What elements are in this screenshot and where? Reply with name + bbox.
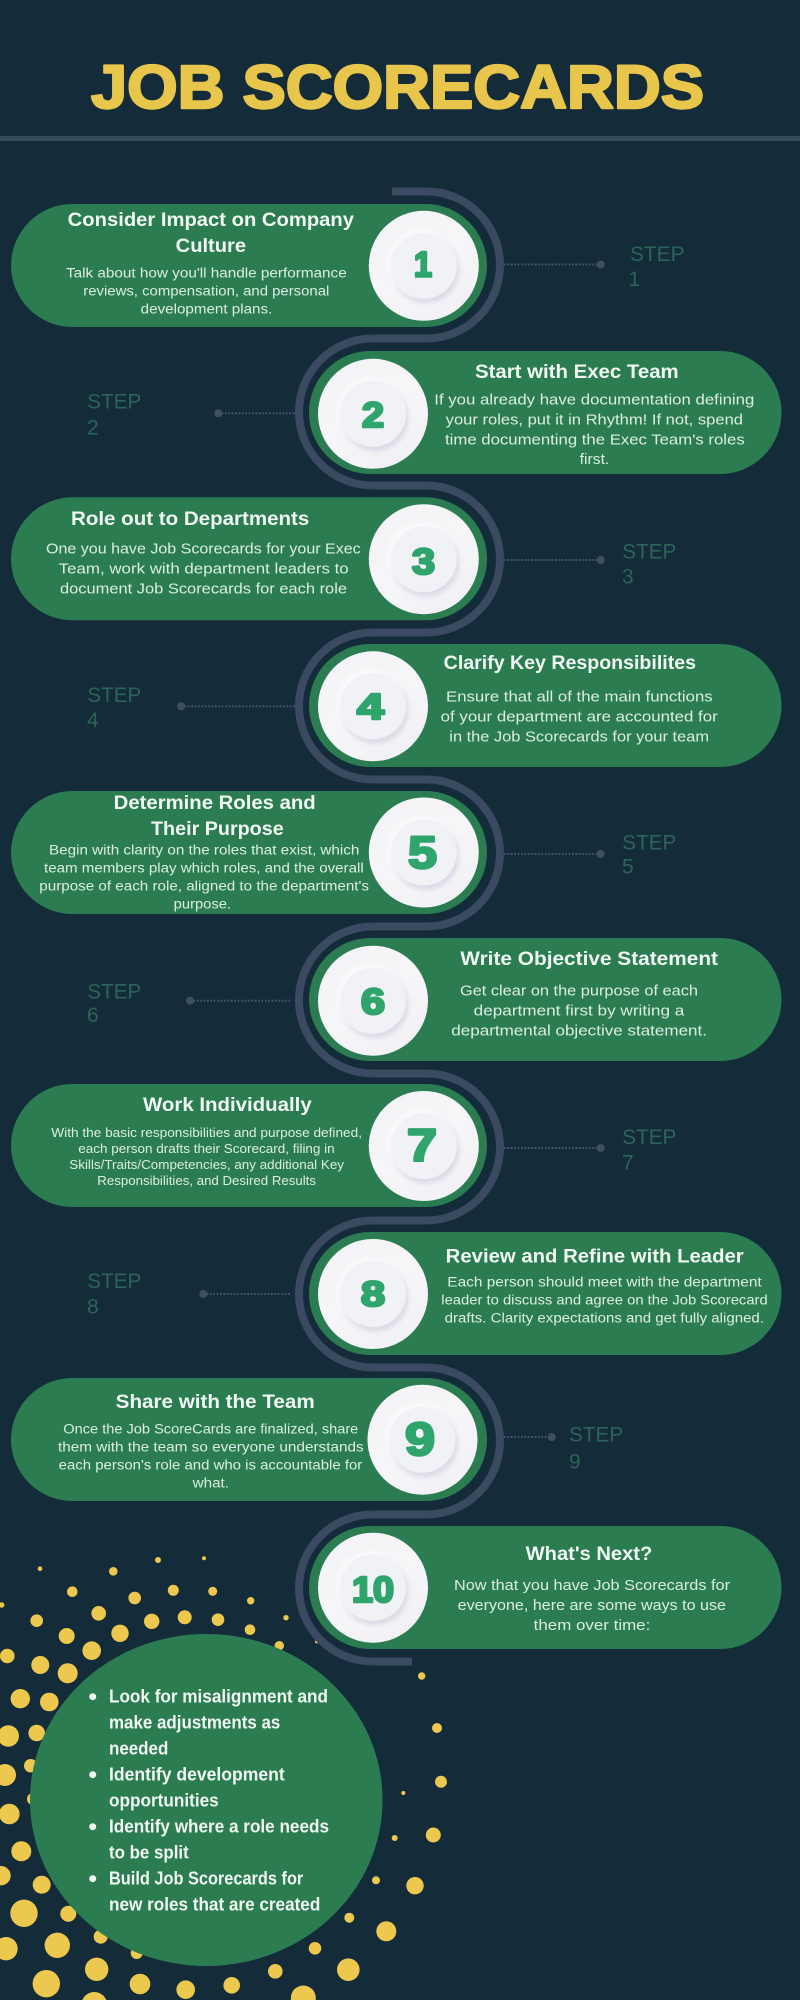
heading: step 10: What's Next? (526, 1543, 652, 1565)
callout: step 6 label: STEP (87, 980, 141, 1003)
panel: step 1 (11, 204, 487, 327)
text: step 1 body: development plans. (141, 301, 272, 317)
text: step 9 body: them with the team so everyone understands (58, 1439, 364, 1455)
panel: step 5 (11, 791, 487, 914)
callout: step 9 label: STEP (569, 1424, 623, 1447)
callout: step 9 label: 9 (569, 1450, 581, 1473)
text: step 3 body: One you have Job Scorecards for your Exec (46, 540, 361, 557)
list: next steps: opportunities (109, 1791, 219, 1811)
list: next steps: new roles that are created (109, 1895, 320, 1915)
callout: step 6 label: 6 (87, 1004, 99, 1027)
panel: step 6 (309, 938, 782, 1061)
callout: step 4 label: 4 (87, 709, 99, 732)
icon: number disc 7 (369, 1091, 479, 1201)
text: step 9 body: what. (192, 1475, 229, 1491)
text: step 6 body: Get clear on the purpose of each (460, 982, 698, 999)
list: next steps: Identify development (109, 1765, 285, 1785)
text: step 1 body (66, 265, 347, 317)
list: next steps: make adjustments as (109, 1713, 280, 1733)
icon: number disc 1: 1 (414, 246, 432, 285)
text: step 8 body (441, 1274, 768, 1326)
panel: step 2 (309, 351, 782, 474)
text: step 2 body (434, 391, 754, 468)
text: step 2 body: If you already have documentation defining (434, 391, 754, 408)
text: step 2 body: your roles, put it in Rhythm! If not, spend (446, 411, 743, 428)
text: step 5 body: Begin with clarity on the roles that exist, which (49, 843, 359, 859)
heading: step 7: Work Individually (143, 1094, 312, 1116)
icon: number disc 4: 4 (357, 686, 384, 727)
callout: step 1 label: STEP (630, 243, 684, 266)
text: step 1 body: reviews, compensation, and personal (83, 283, 329, 299)
text: step 2 body: time documenting the Exec Team's roles (445, 431, 745, 448)
text: step 3 body: document Job Scorecards for each role (60, 580, 347, 597)
icon: number disc 6: 6 (361, 981, 385, 1022)
text: step 2 body: first. (580, 451, 609, 468)
heading: step 5: Their Purpose (151, 818, 284, 840)
icon: number disc 6 (318, 946, 428, 1056)
icon: number disc 1 (369, 211, 479, 321)
panel: step 10 (309, 1526, 782, 1649)
text: step 4 body: in the Job Scorecards for your team (449, 728, 709, 745)
text: step 6 body: department first by writing a (474, 1002, 685, 1019)
icon: number disc 4 (318, 651, 428, 761)
text: step 4 body: of your department are accounted for (441, 708, 718, 725)
panel: step 7 (11, 1084, 487, 1207)
text: step 8 body: leader to discuss and agree on the Job Scorecard (441, 1292, 768, 1308)
callout: step 2 label (87, 391, 295, 439)
text: step 9 body: Once the Job ScoreCards are finalized, share (63, 1421, 358, 1437)
text: step 10 body: Now that you have Job Scorecards for (454, 1577, 730, 1594)
text: step 5 body (39, 843, 369, 913)
callout: step 7 label: 7 (622, 1151, 634, 1174)
callout: step 5 label: 5 (622, 855, 634, 878)
icon: number disc 2: 2 (362, 396, 384, 435)
icon: number disc 7: 7 (407, 1120, 437, 1170)
text: step 6 body: departmental objective statement. (451, 1022, 707, 1039)
callout: step 4 label: STEP (87, 684, 141, 707)
heading: step 9: Share with the Team (116, 1391, 315, 1413)
text: step 3 body: Team, work with department leaders to (59, 560, 349, 577)
text: step 5 body: purpose of each role, aligned to the department's (39, 879, 369, 895)
winding track path (299, 192, 500, 1662)
text: step 3 body (46, 540, 361, 597)
icon: number disc 8 (318, 1239, 428, 1349)
callout: step 7 label: STEP (622, 1126, 676, 1149)
icon: number disc 9 (368, 1385, 478, 1495)
text: step 5 body: team members play which roles, and the overall (44, 861, 364, 877)
heading: step 1 (68, 209, 354, 257)
text: step 9 body: each person's role and who is accountable for (59, 1457, 363, 1473)
list: next steps (89, 1687, 329, 1915)
panel: step 9 (11, 1378, 487, 1501)
heading: step 8: Review and Refine with Leader (446, 1245, 744, 1267)
icon: number disc 5: 5 (408, 827, 437, 878)
icon: number disc 10 (318, 1533, 428, 1643)
panel: step 4 (309, 644, 782, 767)
callout: step 1 label (504, 243, 684, 291)
callout: step 8 label: 8 (87, 1295, 99, 1318)
text: step 9 body (58, 1421, 364, 1491)
text: step 8 body: Each person should meet with the department (447, 1274, 762, 1290)
icon: number disc 8: 8 (361, 1275, 385, 1314)
title: JOB SCORECARDS (91, 53, 704, 121)
callout: step 2 label: STEP (87, 391, 141, 414)
text: step 5 body: purpose. (174, 897, 231, 913)
callout: step 1 label: 1 (628, 268, 640, 291)
text: step 1 body: Talk about how you'll handle performance (66, 265, 347, 281)
text: step 4 body: Ensure that all of the main functions (446, 688, 713, 705)
text: step 4 body (441, 688, 718, 745)
panel: step 8 (309, 1232, 782, 1355)
panel: step 3 (11, 497, 487, 620)
decorative dot burst (0, 1556, 447, 2000)
text: step 6 body (451, 982, 707, 1039)
callout: step 5 label: STEP (622, 831, 676, 854)
text: step 10 body (454, 1577, 730, 1634)
text: step 8 body: drafts. Clarity expectations and get fully aligned. (445, 1310, 764, 1326)
callout: step 3 label (504, 540, 676, 588)
icon: number disc 3 (369, 504, 479, 614)
icon: number disc 3: 3 (412, 541, 435, 582)
text: step 7 body: Responsibilities, and Desired Results (97, 1173, 317, 1188)
heading: step 5: Determine Roles and (114, 792, 316, 814)
list: next steps: Build Job Scorecards for (109, 1869, 303, 1889)
heading: step 6: Write Objective Statement (460, 948, 719, 970)
heading: step 1: Consider Impact on Company (68, 209, 354, 231)
text: step 7 body (51, 1125, 362, 1188)
callout: step 6 label (87, 980, 290, 1027)
text: step 7 body: Skills/Traits/Competencies, any additional Key (69, 1157, 345, 1172)
callout: step 8 label: STEP (87, 1270, 141, 1293)
callout: step 8 label (87, 1270, 290, 1318)
heading: step 4: Clarify Key Responsibilites (444, 652, 696, 674)
callout: step 9 label (504, 1424, 623, 1473)
list: next steps: to be split (109, 1843, 189, 1863)
text: step 7 body: With the basic responsibilities and purpose defined, (51, 1125, 362, 1140)
callout: step 2 label: 2 (87, 416, 99, 439)
heading: step 2: Start with Exec Team (475, 361, 679, 383)
heading: step 5 (114, 792, 316, 840)
list: next steps: Look for misalignment and (109, 1687, 328, 1707)
list: next steps: Identify where a role needs (109, 1817, 329, 1837)
heading: step 1: Culture (176, 235, 246, 257)
text: step 10 body: everyone, here are some ways to use (458, 1597, 726, 1614)
callout: step 3 label: 3 (622, 565, 634, 588)
callout: step 3 label: STEP (622, 540, 676, 563)
icon: number disc 5 (369, 798, 479, 908)
icon: number disc 10: 10 (352, 1569, 394, 1610)
callout: step 7 label (504, 1126, 676, 1174)
text: step 10 body: them over time: (534, 1617, 650, 1634)
callout: step 4 label (87, 684, 295, 732)
text: step 7 body: each person drafts their Scorecard, filing in (78, 1141, 335, 1156)
panel: next steps circle (30, 1634, 383, 1966)
icon: number disc 9: 9 (405, 1413, 435, 1465)
callout: step 5 label (504, 831, 676, 878)
heading: step 3: Role out to Departments (71, 508, 309, 530)
icon: number disc 2 (318, 359, 428, 469)
list: next steps: needed (109, 1739, 168, 1759)
